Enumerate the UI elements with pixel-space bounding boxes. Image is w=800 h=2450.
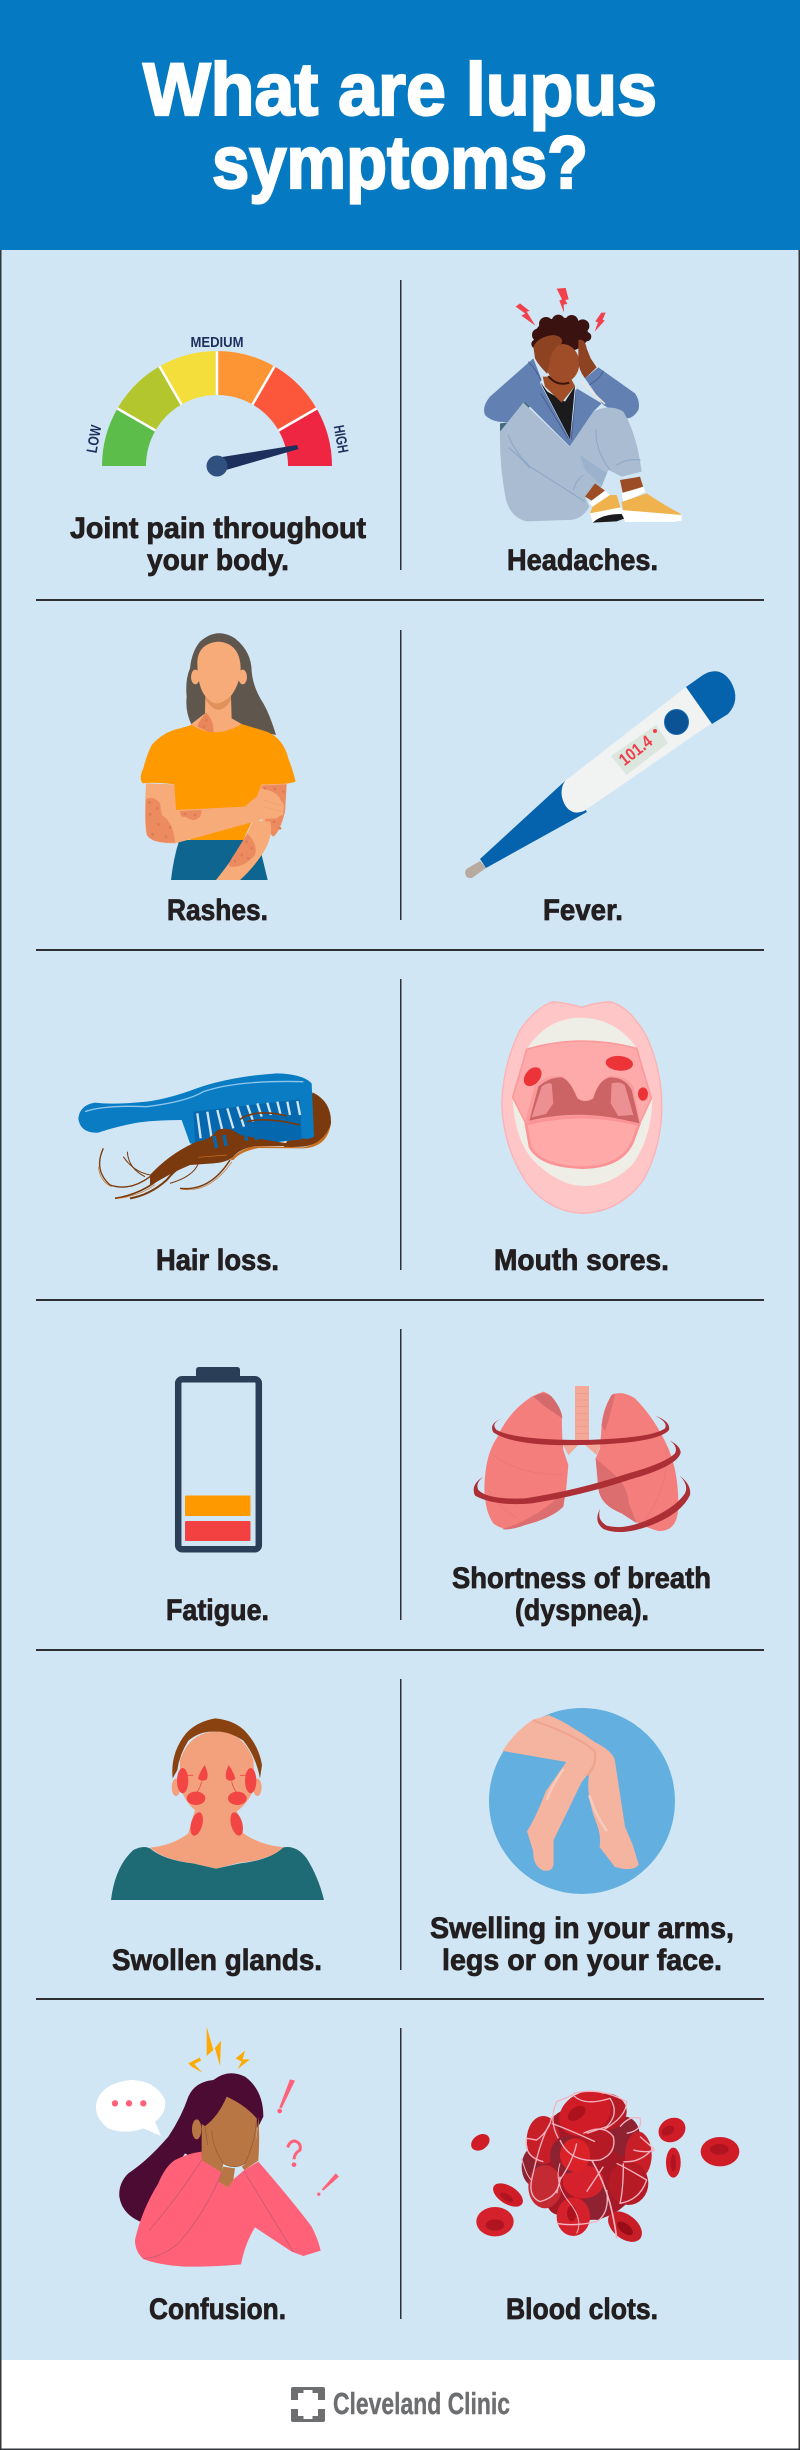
label: hair loss: Hair loss. (156, 1244, 279, 1277)
label: rashes: Rashes. (167, 894, 268, 927)
label: confusion: Confusion. (149, 2293, 286, 2326)
label: headaches: Headaches. (507, 544, 658, 577)
panel: blood clots (468, 2082, 739, 2326)
label: swollen glands: Swollen glands. (112, 1944, 322, 1977)
title (143, 48, 657, 204)
label: swelling: Swelling in your arms, (430, 1912, 734, 1945)
panel: fever (465, 671, 735, 927)
label: fever: Fever. (543, 894, 623, 927)
icon: pain gauge: HIGH (330, 424, 351, 454)
label: shortness of breath: (dyspnea). (515, 1594, 649, 1627)
label: joint pain (70, 512, 366, 577)
panel: joint pain (70, 334, 366, 577)
icon: pain gauge: MEDIUM (190, 334, 244, 351)
panel: swelling (430, 1708, 734, 1977)
title: symptoms? (212, 121, 588, 204)
panel: rashes (141, 633, 296, 927)
label: mouth sores: Mouth sores. (494, 1244, 669, 1277)
title: What are lupus (143, 48, 657, 131)
label: shortness of breath (452, 1562, 711, 1627)
icon: lungs (474, 1386, 690, 1532)
label: swelling (430, 1912, 734, 1977)
panel: mouth sores (494, 1002, 669, 1277)
panel: fatigue (166, 1367, 269, 1627)
label: joint pain: Joint pain throughout (70, 512, 366, 545)
icon: pain gauge (84, 334, 351, 476)
icon: swollen legs (489, 1708, 675, 1894)
icon: thermometer: 101.4 (615, 731, 656, 769)
icon: thermometer (465, 671, 735, 878)
panel: shortness of breath (452, 1386, 711, 1627)
icon: head with swollen glands (111, 1718, 324, 1900)
icon: low battery (178, 1367, 259, 1549)
panel: confusion (96, 2027, 339, 2326)
icon: pain gauge: LOW (84, 423, 105, 454)
icon: woman with rashes (141, 633, 296, 880)
logo wordmark: Cleveland Clinic (333, 2386, 510, 2421)
label: shortness of breath: Shortness of breath (452, 1562, 711, 1595)
panel: hair loss (78, 1073, 331, 1277)
label: joint pain: your body. (147, 544, 289, 577)
icon: confused woman (96, 2027, 339, 2267)
icon: person holding head (484, 288, 682, 523)
icon: open mouth (502, 1002, 662, 1213)
header band (0, 0, 800, 250)
panel: swollen glands (111, 1718, 324, 1977)
label: blood clots: Blood clots. (506, 2293, 658, 2326)
label: fatigue: Fatigue. (166, 1594, 269, 1627)
footer (0, 2360, 800, 2450)
logo icon: Cleveland Clinic cross (291, 2387, 325, 2422)
icon: blood clot (468, 2082, 739, 2248)
icon: comb with hair (78, 1073, 331, 1199)
label: swelling: legs or on your face. (442, 1944, 722, 1977)
panel: headaches (484, 288, 682, 577)
